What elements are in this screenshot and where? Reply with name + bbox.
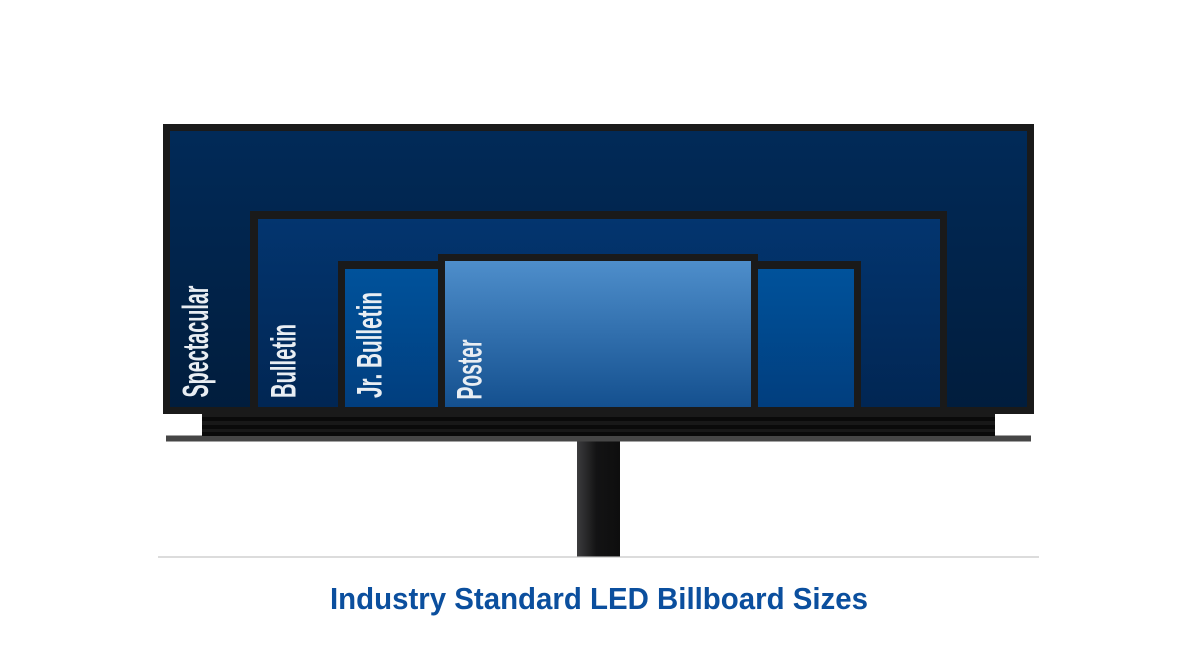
panel: spectacular (163, 124, 1034, 417)
title: Industry Standard LED Billboard Sizes (330, 581, 868, 616)
billboard base ledge (166, 410, 1031, 442)
label: bulletin: Bulletin (264, 324, 304, 398)
panel: poster (438, 254, 758, 407)
panel: bulletin (250, 211, 947, 407)
label: jr. bulletin: Jr. Bulletin (350, 292, 390, 398)
panel: jr. bulletin (338, 261, 861, 407)
ground line (158, 556, 1039, 558)
label: poster: Poster (450, 339, 490, 400)
billboard pole (577, 441, 620, 556)
label: spectacular: Spectacular (175, 286, 216, 398)
